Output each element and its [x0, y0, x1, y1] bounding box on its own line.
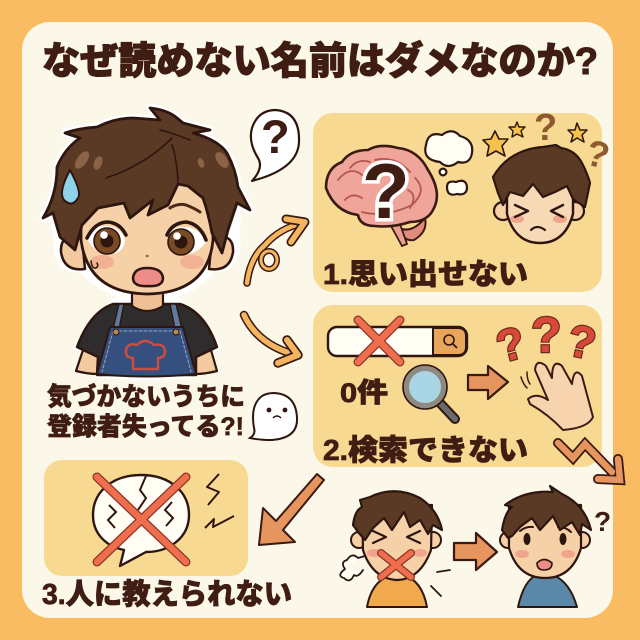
icon: magnifying glass [403, 365, 455, 419]
icon: red question marks: ? [563, 314, 601, 370]
face [81, 150, 213, 294]
icon: question speech bubble: ? [261, 110, 290, 163]
icon: question speech bubble [251, 110, 299, 181]
icon: sweat drop [62, 170, 79, 204]
panel: 3 cannot tell others [44, 460, 248, 576]
arrow: to hand [468, 366, 508, 399]
zero results text: 0件 [340, 378, 388, 408]
icon: broken speech bubble crossed out [93, 475, 189, 566]
panel: 1 cannot recall [313, 107, 614, 292]
illustration: boy covering mouth [340, 491, 450, 607]
label: 3: 3.人に教えられない [42, 578, 292, 611]
nose and sweat [146, 255, 149, 257]
eyebrows [170, 204, 200, 212]
title: なぜ読めない名前はダメなのか? [42, 40, 598, 83]
body [76, 290, 217, 376]
icon: stars and question marks [483, 107, 614, 177]
sticker outline [43, 108, 250, 376]
arrow: curly up to panel 1 [247, 219, 305, 283]
icon: search bar crossed out [328, 320, 467, 362]
mouth [133, 268, 163, 286]
puff of breath [340, 555, 365, 580]
label: 2: 2.検索できない [323, 434, 528, 467]
arrow: down-left to panel 3 [259, 474, 324, 545]
arrow: curved down to panel 2 [244, 315, 298, 363]
icon: red question marks: ? [531, 307, 562, 363]
hair [43, 108, 250, 253]
icon: red question marks [491, 307, 601, 373]
caption: losing subscribers [47, 382, 245, 441]
icon: brain with question mark: ? [362, 147, 410, 235]
arrow: zigzag downward [558, 443, 620, 480]
icon: small question mark: ? [594, 506, 611, 537]
icon: lightning marks [205, 474, 234, 528]
icon: sad ghost [250, 393, 297, 440]
arrow: between boys [454, 533, 497, 570]
blush [90, 255, 204, 269]
caption: losing subscribers: 登録者失ってる?! [47, 413, 244, 441]
eyes [87, 222, 206, 255]
ears [61, 237, 233, 269]
label: 1: 1.思い出せない [323, 258, 528, 291]
icon: waving hand [521, 363, 593, 430]
icon: stars and question marks: ? [534, 107, 557, 149]
icon: brain with question mark [326, 146, 437, 246]
caption: losing subscribers: 気づかないうちに [47, 382, 245, 411]
panel: 2 cannot search [313, 305, 602, 467]
icon: red question marks: ? [491, 316, 530, 373]
chef hat logo [126, 341, 165, 369]
icon: boy face with closed eyes [493, 145, 590, 243]
apron [97, 327, 196, 376]
illustration: confused boy [500, 486, 591, 607]
icon: stars and question marks: ? [581, 132, 614, 177]
character: worried boy in apron [43, 108, 250, 376]
icon: thought cloud [425, 131, 472, 195]
